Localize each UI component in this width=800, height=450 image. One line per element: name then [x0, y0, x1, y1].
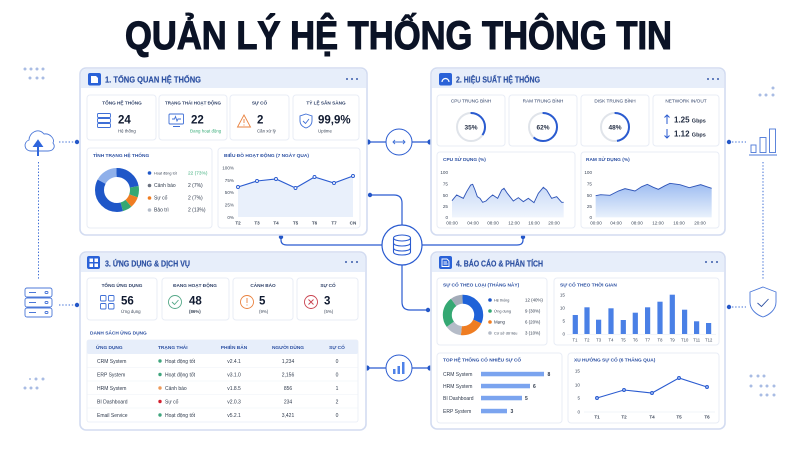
chart: incidents over time: T11	[693, 338, 701, 342]
chart: CPU usage: 0	[445, 215, 448, 220]
chart: CPU usage: CPU SỬ DỤNG (%)	[443, 156, 486, 163]
gauge: RAM	[509, 95, 577, 146]
card: 7-day activity chart: T4	[273, 220, 279, 226]
stat: total apps: Ứng dụng	[121, 309, 141, 314]
chart: incidents over time: T5	[621, 338, 626, 342]
table: applications: HRM System	[97, 386, 126, 392]
heading: panel 3: 3. ỨNG DỤNG & DỊCH VỤ	[105, 260, 190, 268]
icon: bar chart outline	[749, 129, 777, 155]
card: 7-day activity chart: BIỂU ĐỒ HOẠT ĐỘNG (7 NGÀY QUA)	[224, 151, 309, 159]
stat: network: 1.25 Gbps	[674, 116, 706, 124]
chart: incidents over time: T9	[670, 338, 675, 342]
panel: 4 reports and analysis	[431, 252, 725, 429]
legend: incident types: Hệ thống	[494, 298, 509, 302]
card: 7-day activity chart	[218, 148, 360, 228]
card: 7-day activity chart: 0%	[227, 215, 234, 220]
gauge: CPU: CPU TRUNG BÌNH	[451, 98, 491, 104]
connector: cloud to server	[38, 162, 40, 280]
gauge: CPU: 35%	[464, 124, 478, 132]
chart: incident donut	[447, 299, 479, 331]
connectors and central hub	[279, 139, 525, 371]
chart: incidents over time: T2	[585, 338, 590, 342]
stat: app incidents	[297, 278, 358, 320]
chart: CPU usage: 12:00	[508, 220, 520, 226]
icon: panel 4 header	[439, 256, 452, 269]
chart: RAM usage: 0	[589, 215, 592, 220]
stat: operating status	[159, 95, 227, 140]
stat: operating status: 22	[191, 114, 204, 126]
icon: cloud upload	[25, 131, 54, 156]
legend: status: 2 (7%)	[188, 183, 203, 189]
table: applications: CRM System	[97, 359, 126, 365]
table: applications: 0	[336, 359, 339, 365]
menu dots: panel 4	[705, 261, 718, 263]
chart: top systems with incidents: ERP System	[443, 409, 471, 415]
chart: CPU usage: 16:00	[528, 220, 540, 226]
chart: six-month incident trend: T1	[594, 414, 600, 420]
chart: CPU usage: 08:00	[487, 220, 499, 226]
stat: total systems: 24	[118, 114, 131, 126]
chart: six-month incident trend: 5	[577, 396, 580, 400]
connector: panel 4 to shield	[727, 305, 746, 309]
connector: cloud to panel 1	[59, 140, 79, 144]
card: 7-day activity chart: 100%	[222, 166, 234, 170]
chart: incidents over time: T12	[705, 338, 713, 342]
chart: RAM usage: 50	[587, 193, 592, 198]
stat: warnings: 5	[259, 296, 266, 308]
stat: network: 1.12 Gbps	[674, 130, 706, 138]
card: 7-day activity chart: 50%	[225, 190, 234, 195]
chart: incidents over time: T7	[645, 338, 651, 342]
table: applications: v2.0.3	[227, 399, 241, 405]
chart: six-month incident trend: T6	[704, 414, 710, 420]
chart: RAM usage: 04:00	[610, 220, 622, 226]
table: applications: NGƯỜI DÙNG	[272, 343, 304, 351]
chart: CPU usage: 100	[440, 170, 448, 175]
chart: incidents over time	[554, 278, 719, 345]
chart: top systems with incidents: HRM System	[443, 384, 472, 390]
chart: incidents over time: T8	[658, 338, 663, 342]
chart: incidents over time: T6	[633, 338, 638, 342]
gauge: disk: DISK TRUNG BÌNH	[594, 98, 636, 104]
stat: incidents: Cần xử lý	[257, 128, 277, 134]
chart: top systems with incidents: 3	[510, 409, 514, 415]
stat: network: NETWORK IN/OUT	[665, 98, 707, 104]
icon: server rack	[25, 288, 52, 317]
chart: top systems with incidents: 5	[525, 396, 528, 402]
table: applications: 2	[336, 399, 339, 405]
chart: top systems with incidents: BI Dashboard	[443, 396, 474, 402]
table: applications: ERP System	[97, 372, 125, 378]
chart: status donut	[100, 172, 134, 208]
chart: RAM usage: 08:00	[631, 220, 643, 226]
card: 7-day activity chart: T7	[331, 220, 337, 226]
stat: warnings: (9%)	[259, 309, 269, 314]
table: applications: 3,421	[282, 413, 294, 419]
chart: RAM usage: 12:00	[652, 220, 664, 226]
legend: status: 2 (7%)	[188, 196, 203, 202]
chart: incidents over time: SỰ CỐ THEO THỜI GIAN	[560, 280, 617, 288]
legend: status: 2 (13%)	[188, 208, 206, 214]
chart: top systems with incidents: CRM System	[443, 372, 472, 378]
table: applications: TRẠNG THÁI	[158, 344, 188, 351]
chart: top systems with incidents	[437, 353, 562, 423]
gauge: RAM: 62%	[536, 124, 550, 132]
stat: app incidents: (5%)	[324, 309, 334, 314]
stat: app incidents: SỰ CỐ	[320, 282, 336, 288]
table: applications: 0	[336, 413, 339, 419]
stat: availability: TỶ LỆ SẴN SÀNG	[306, 98, 346, 106]
panel: 2 system performance	[431, 68, 725, 235]
gauge: disk: 48%	[608, 124, 622, 132]
chart: CPU usage	[437, 152, 575, 228]
card: system status donut: TÌNH TRẠNG HỆ THỐNG	[93, 151, 149, 159]
table: applications: Email Service	[97, 413, 128, 419]
card: incidents by type: SỰ CỐ THEO LOẠI (THÁNG NÀY)	[443, 282, 520, 288]
chart: RAM usage: 16:00	[673, 220, 685, 226]
stat: incidents: SỰ CỐ	[252, 100, 268, 106]
table: applications: v3.1.0	[227, 372, 241, 378]
legend: status: Hoạt động tốt	[154, 172, 178, 176]
chart: six-month incident trend: 0	[577, 410, 580, 414]
panel: 3 applications and services	[80, 252, 366, 430]
table: applications: BI Dashboard	[97, 399, 128, 405]
chart: RAM usage: 25	[587, 204, 592, 209]
legend: incident types: 9 (30%)	[525, 308, 541, 314]
chart: CPU usage: 20:00	[548, 220, 560, 226]
card: 7-day activity chart: T2	[235, 220, 241, 226]
chart: RAM usage: RAM SỬ DỤNG (%)	[586, 156, 630, 163]
chart: top systems with incidents: 6	[533, 384, 536, 390]
table: applications: Sự cố	[165, 399, 179, 405]
menu dots: panel 3	[345, 261, 358, 263]
stat: warnings	[233, 278, 293, 320]
stat: active apps	[162, 278, 229, 320]
stat: warnings: CẢNH BÁO	[250, 282, 276, 288]
heading: application list: DANH SÁCH ỨNG DỤNG	[90, 330, 147, 336]
legend: status: 22 (73%)	[188, 170, 208, 176]
table: applications: Hoạt động tốt	[165, 372, 196, 378]
card: 7-day activity chart: 25%	[225, 202, 234, 208]
legend: incident types: 12 (40%)	[525, 298, 543, 302]
chart: CPU usage: 50	[443, 193, 448, 198]
chart: six-month incident trend: XU HƯỚNG SỰ CỐ (6 THÁNG QUA)	[574, 356, 656, 364]
card: incidents by type	[437, 278, 547, 345]
connector: server to panel 3	[59, 303, 79, 307]
chart: top systems with incidents: 8	[548, 372, 550, 378]
chart: CPU usage: 00:00	[446, 220, 458, 226]
chart: incidents over time: T10	[681, 338, 689, 342]
card: 7-day activity chart: T5	[293, 220, 299, 226]
legend: incident types: Mạng	[494, 320, 506, 324]
icon: panel 2 header	[439, 73, 452, 86]
stat: app incidents: 3	[324, 296, 330, 308]
stat: active apps: ĐANG HOẠT ĐỘNG	[173, 281, 217, 288]
table: applications: 0	[336, 372, 339, 378]
legend: incident types: 3 (10%)	[525, 330, 541, 336]
heading: panel 4: 4. BÁO CÁO & PHÂN TÍCH	[456, 260, 543, 268]
menu dots: panel 1	[346, 78, 358, 80]
card: system status donut	[87, 148, 212, 228]
chart: RAM usage: 20:00	[694, 220, 706, 226]
table: applications: PHIÊN BẢN	[221, 343, 248, 351]
chart: incidents over time: 15	[560, 292, 565, 298]
legend: incident types: Cơ sở dữ liệu	[494, 332, 517, 336]
stat: total systems: TỔNG HỆ THỐNG	[102, 98, 142, 106]
chart: six-month incident trend	[568, 353, 719, 423]
chart: six-month incident trend: 10	[575, 382, 580, 388]
stat: total systems: Hệ thống	[118, 128, 136, 134]
table: applications: Hoạt động tốt	[165, 359, 196, 365]
table: applications: 234	[284, 399, 292, 405]
stat: total apps	[87, 278, 157, 320]
chart: incidents over time: 5	[562, 318, 565, 324]
table: applications: SỰ CỐ	[329, 344, 345, 351]
card: 7-day activity chart: 75%	[225, 178, 234, 183]
table: applications: v2.4.1	[227, 359, 241, 365]
chart: CPU usage: 75	[443, 182, 448, 186]
chart: RAM usage: 00:00	[590, 220, 602, 226]
gauge: RAM: RAM TRUNG BÌNH	[523, 98, 563, 104]
icon: transfer hub	[386, 129, 412, 155]
chart: RAM usage: 100	[584, 170, 592, 175]
stat: incidents: 2	[257, 114, 263, 126]
stat: availability: Uptime	[318, 128, 332, 134]
chart: incidents over time: T1	[573, 338, 578, 342]
chart: CPU usage: 04:00	[467, 220, 479, 226]
heading: panel 2: 2. HIỆU SUẤT HỆ THỐNG	[456, 74, 540, 84]
chart: six-month incident trend: 15	[575, 368, 580, 374]
stat: total apps: TỔNG ỨNG DỤNG	[102, 282, 143, 288]
chart: incidents over time: T4	[609, 338, 614, 342]
chart: six-month incident trend: T2	[621, 414, 627, 420]
stat: network	[653, 95, 719, 146]
table: applications: 1,234	[282, 359, 294, 365]
menu dots: panel 2	[707, 78, 719, 80]
legend: incident types	[488, 298, 543, 336]
stat: active apps: 48	[189, 296, 202, 308]
icon: shield check	[750, 287, 776, 317]
stat: operating status: TRẠNG THÁI HOẠT ĐỘNG	[165, 98, 221, 106]
stat: availability: 99,9%	[318, 114, 351, 126]
gauge: disk	[581, 95, 649, 146]
panel: 1 system overview	[80, 68, 367, 235]
table: applications: 2,156	[282, 372, 294, 378]
table: applications: Hoạt động tốt	[165, 413, 196, 419]
icon: panel 1 header	[88, 73, 101, 86]
chart: RAM usage: 75	[587, 182, 592, 186]
legend: status	[148, 170, 208, 214]
chart: CPU usage: 25	[443, 204, 448, 209]
stat: total systems	[87, 95, 156, 140]
legend: incident types: Ứng dụng	[494, 308, 511, 314]
table: applications: ỨNG DỤNG	[96, 344, 123, 351]
stat: total apps: 56	[121, 296, 134, 308]
icon: panel 3 header	[87, 256, 100, 269]
stat: active apps: (86%)	[189, 309, 201, 314]
chart: RAM usage	[581, 152, 719, 228]
gauge: CPU	[437, 95, 505, 146]
card: 7-day activity chart: CN	[350, 220, 357, 226]
legend: incident types: 6 (20%)	[525, 320, 541, 324]
chart: six-month incident trend: T4	[649, 414, 655, 420]
chart: incidents over time: T3	[596, 338, 602, 342]
chart: incidents over time: 10	[560, 306, 565, 310]
table: applications: v5.2.1	[227, 413, 241, 419]
chart: six-month incident trend: T5	[676, 414, 682, 420]
connector: panel 2 to bars icon	[727, 140, 746, 144]
title: QUẢN LÝ HỆ THỐNG THÔNG TIN	[125, 12, 672, 58]
chart: top systems with incidents: TOP HỆ THỐNG CÓ NHIỀU SỰ CỐ	[443, 356, 521, 364]
table: applications: v1.8.5	[227, 386, 241, 392]
icon: central database	[382, 225, 422, 265]
stat: operating status: Đang hoạt động	[190, 128, 222, 134]
heading: panel 1: 1. TỔNG QUAN HỆ THỐNG	[105, 74, 201, 84]
card: 7-day activity chart: T6	[312, 220, 318, 226]
connector: bars to shield	[762, 162, 764, 280]
stat: incidents	[230, 95, 289, 140]
legend: status: Bảo trì	[154, 208, 169, 214]
icon: analytics hub	[386, 355, 412, 381]
legend: status: Cảnh báo	[154, 183, 176, 189]
table: applications: 1	[336, 386, 339, 392]
card: 7-day activity chart: T3	[254, 220, 260, 226]
table: applications	[87, 340, 358, 422]
stat: availability	[293, 95, 359, 140]
chart: incidents over time: 0	[562, 332, 565, 336]
legend: status: Sự cố	[154, 196, 168, 202]
table: applications: Cảnh báo	[165, 386, 187, 392]
decorative dots	[24, 68, 776, 396]
table: applications: 856	[284, 386, 292, 392]
